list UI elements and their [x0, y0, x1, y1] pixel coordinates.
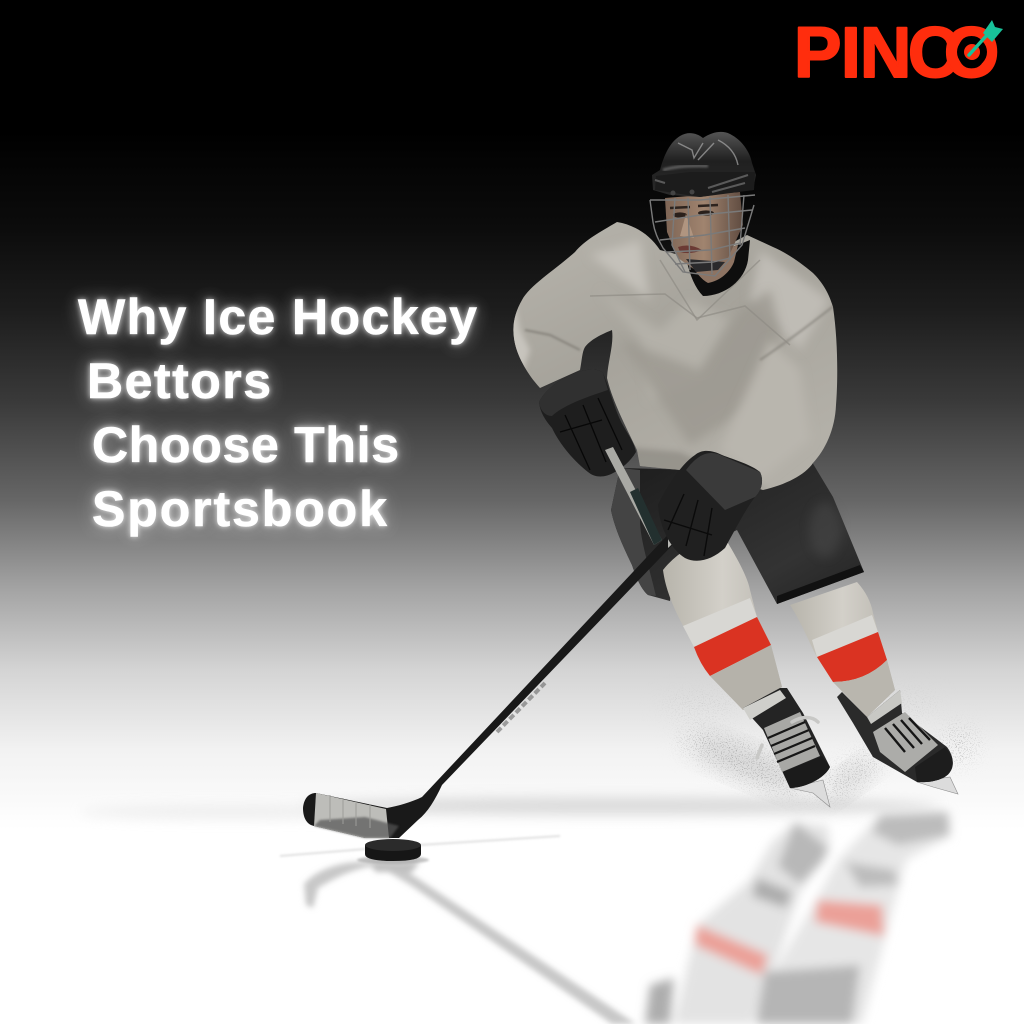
hockey player — [303, 132, 958, 838]
shorts — [611, 462, 864, 604]
skate and leg reflections — [645, 812, 950, 1024]
stick shaft and blade — [303, 525, 684, 838]
jersey — [500, 222, 837, 490]
right red sock band — [817, 632, 887, 682]
face cage — [650, 195, 755, 276]
left leg — [663, 543, 782, 710]
upper glove — [539, 370, 636, 476]
neck and collar — [687, 240, 750, 296]
logo: PINCO: PINCO — [794, 14, 999, 93]
lower glove — [658, 451, 762, 561]
ice surface shadow — [80, 797, 940, 856]
stick lettering marks — [497, 683, 545, 732]
stick reflection — [304, 862, 636, 1024]
left red sock band — [694, 617, 771, 676]
face — [665, 192, 743, 272]
ice spray — [660, 693, 976, 807]
helmet and face — [650, 132, 756, 276]
icon: target and arrow — [957, 20, 1003, 67]
right leg — [790, 582, 895, 717]
helmet shell — [652, 132, 756, 197]
title: Why Ice Hockey — [78, 289, 478, 345]
left skate — [743, 688, 830, 807]
right skate — [837, 690, 958, 794]
title: Sportsbook — [92, 481, 389, 537]
title: Choose This — [92, 417, 400, 473]
upper stick shaft — [605, 447, 662, 545]
title — [69, 289, 484, 542]
hockey puck — [357, 839, 429, 864]
title: Bettors — [87, 353, 273, 409]
